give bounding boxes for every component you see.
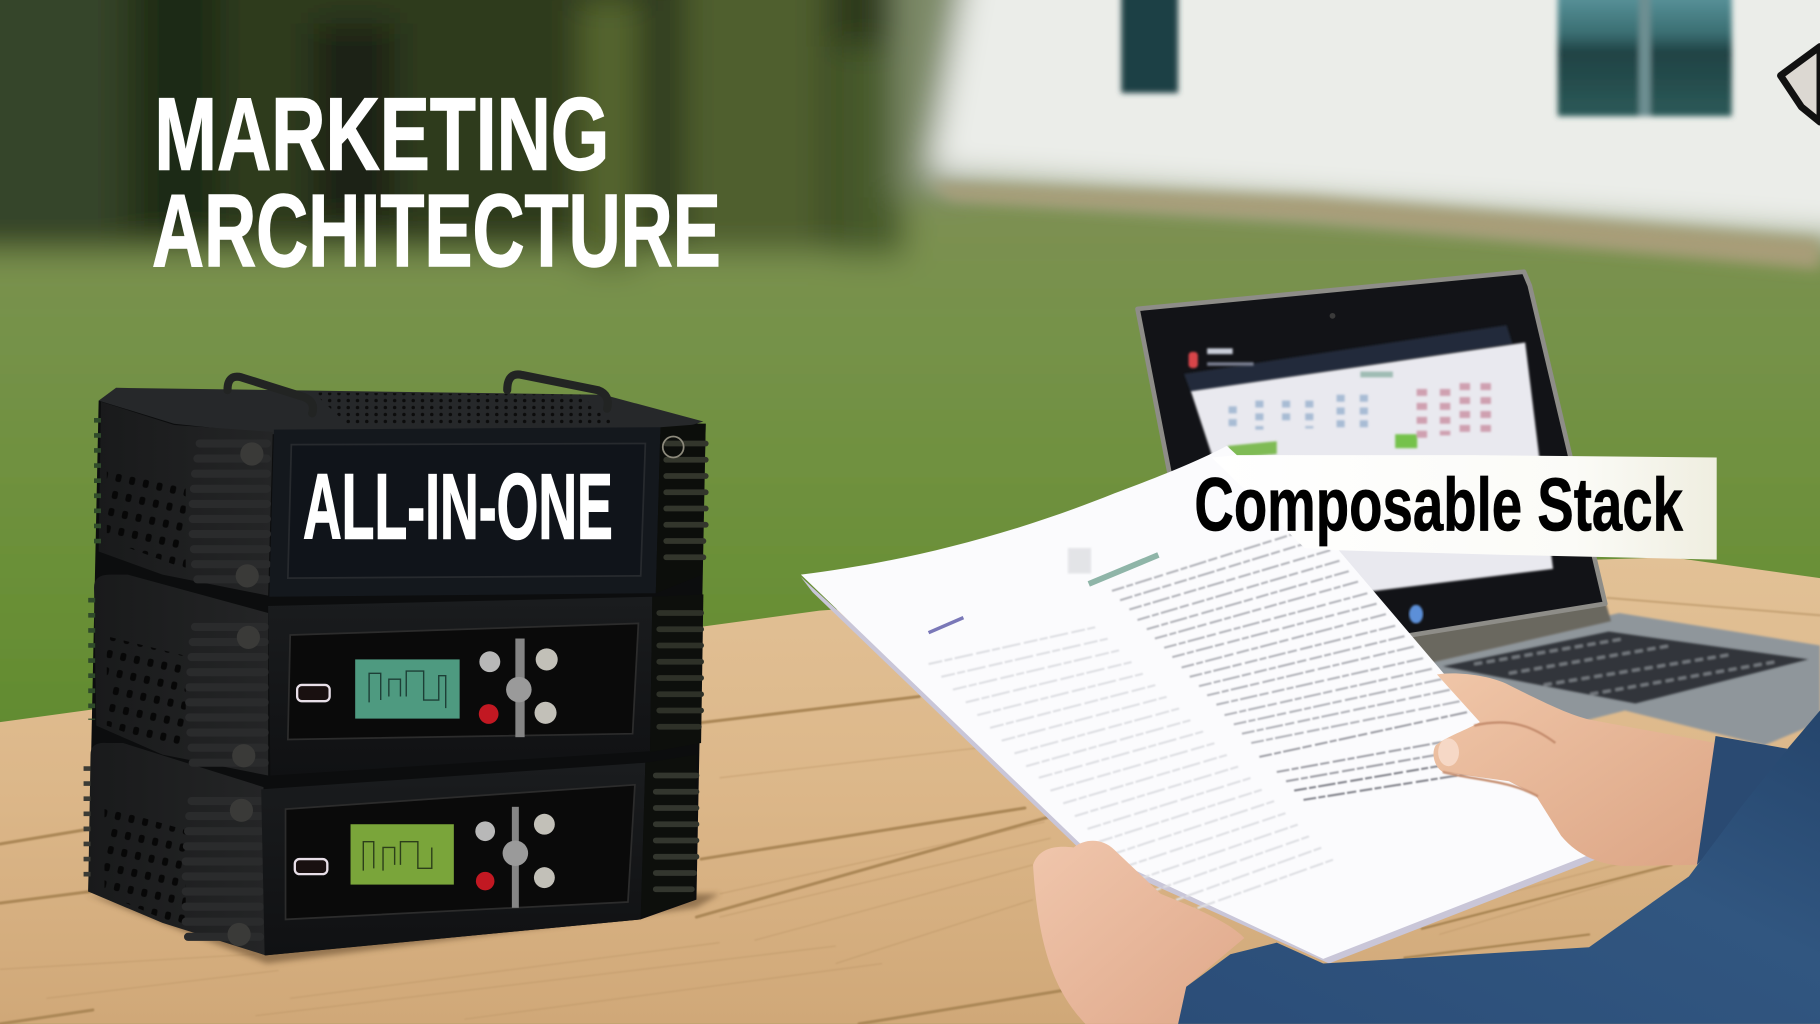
screen header — [1184, 325, 1512, 392]
side panel — [88, 743, 266, 955]
keyboard — [1443, 632, 1808, 704]
teal heading bar — [1089, 555, 1158, 584]
right fins — [641, 755, 696, 917]
left edge fins — [84, 766, 90, 882]
bottom unit — [87, 743, 696, 955]
lcd screen — [351, 824, 454, 885]
left edge fins — [94, 418, 100, 546]
vent holes — [107, 636, 186, 755]
dark foliage — [0, 0, 975, 267]
usb port — [297, 685, 330, 701]
screen dashboard — [1191, 343, 1553, 594]
purple accent bar — [929, 618, 963, 633]
cooling fins — [186, 801, 260, 937]
label strip — [1212, 455, 1717, 560]
small paper icon — [1068, 548, 1091, 574]
right window — [1558, 0, 1732, 116]
table surface — [0, 557, 1820, 1024]
wall base strip — [929, 184, 1820, 269]
front face — [261, 763, 645, 955]
screws — [236, 442, 263, 587]
name plate — [288, 444, 645, 578]
left edge fins — [89, 598, 95, 720]
slider — [512, 807, 519, 908]
hinge — [1407, 601, 1611, 668]
right fins — [656, 424, 706, 593]
side panel — [99, 402, 273, 596]
usb port — [295, 859, 327, 874]
table shadow under stack — [86, 894, 720, 964]
title line two: ARCHITECTURE — [152, 172, 721, 288]
top unit — [98, 374, 706, 597]
vent holes — [104, 807, 186, 929]
hands and sleeves — [1033, 673, 1820, 1024]
server stack: all-in-one — [87, 374, 706, 955]
middle unit — [92, 575, 703, 775]
blue sleeve — [1178, 710, 1820, 1024]
laptop — [1138, 272, 1820, 745]
composable stack label — [1194, 455, 1717, 560]
white house wall — [929, 0, 1820, 238]
right text column — [1112, 528, 1516, 800]
right fins — [650, 594, 703, 752]
stack backing — [88, 401, 706, 955]
lcd screen — [355, 659, 460, 719]
control panel — [288, 623, 638, 740]
blurred outdoor background — [0, 0, 1820, 778]
document — [801, 446, 1597, 964]
control panel — [286, 785, 635, 919]
buttons — [479, 648, 558, 724]
buttons — [475, 814, 555, 890]
webcam — [1330, 313, 1335, 319]
left text column — [929, 627, 1335, 917]
plank gaps — [0, 598, 1820, 1024]
right hand — [1433, 673, 1716, 866]
dashboard marks — [1189, 348, 1486, 459]
front face — [269, 427, 660, 597]
wood grain — [0, 743, 1671, 1019]
label: all-in-one: ALL-IN-ONE — [303, 455, 613, 559]
thumb nail — [1438, 738, 1459, 766]
left window — [1121, 0, 1178, 93]
cooling fins — [193, 444, 267, 579]
laptop base — [1407, 613, 1820, 745]
slider — [515, 639, 525, 737]
wooden table — [0, 557, 1820, 1024]
top vent dots — [313, 392, 615, 425]
screen bezel — [1138, 272, 1605, 636]
logo badge — [663, 437, 684, 457]
house windows — [1121, 0, 1732, 116]
power light — [1409, 605, 1423, 623]
glasses frame at top right — [1781, 47, 1820, 122]
handles — [228, 374, 608, 413]
lawn — [0, 174, 1820, 778]
title line one: MARKETING — [154, 76, 609, 192]
thumb crease — [1443, 722, 1555, 796]
top face — [99, 388, 703, 434]
screws — [232, 626, 260, 767]
screws — [228, 799, 253, 946]
side panel — [94, 575, 268, 775]
left hand — [1033, 841, 1244, 1024]
cooling fins — [189, 627, 265, 763]
paper edge — [801, 577, 1597, 964]
front face — [268, 597, 652, 775]
title — [152, 76, 721, 288]
sleeve cuff — [1697, 736, 1788, 865]
paper sheet — [801, 446, 1596, 959]
vent holes — [107, 470, 186, 569]
